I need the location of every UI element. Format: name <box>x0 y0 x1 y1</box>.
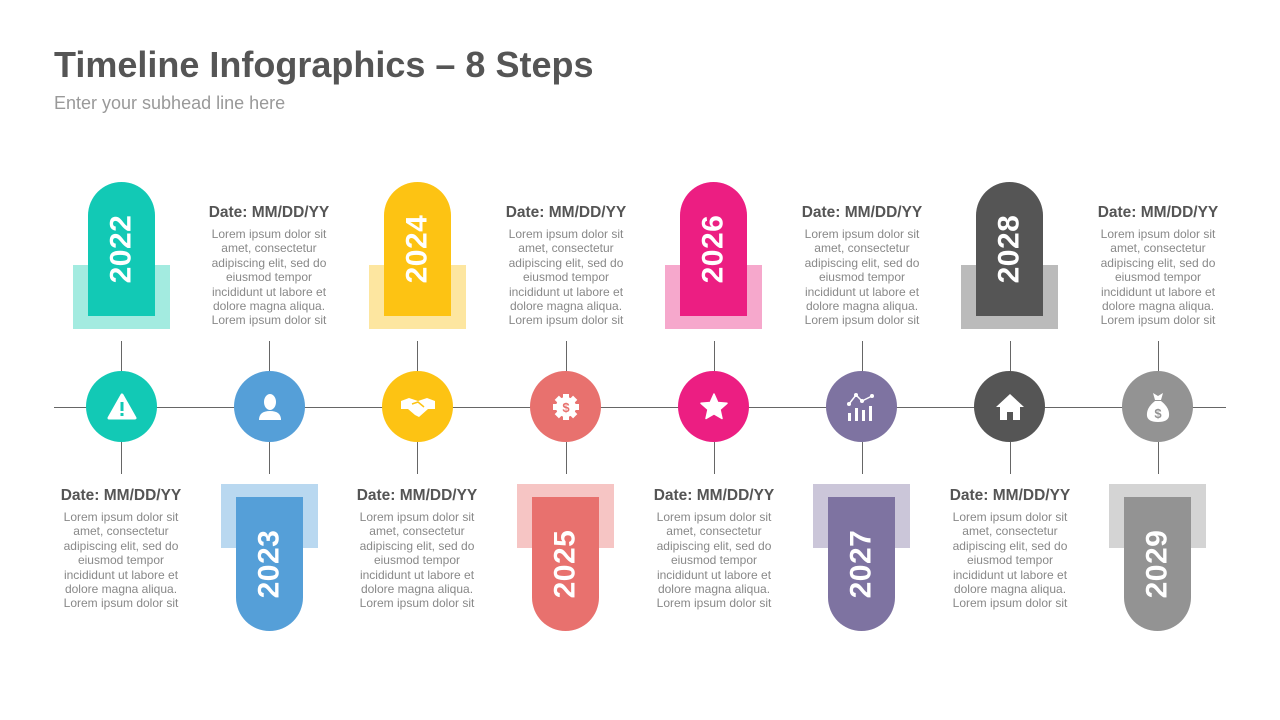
text: 2028 <box>950 487 1070 610</box>
text: 2023: eiusmod tempor <box>226 270 312 284</box>
step 2025 tab <box>517 484 614 631</box>
text: 2024: amet, consectetur <box>369 524 465 538</box>
text: 2023: dolore magna aliqua. <box>213 299 325 313</box>
text: 2029 <box>1098 204 1218 327</box>
step 2024 tab: 2024 <box>400 215 434 283</box>
step 2026 tab <box>665 182 762 329</box>
icon: gear dollar <box>530 371 601 442</box>
text: 2027: incididunt ut labore et <box>805 285 919 299</box>
text: 2029: Lorem ipsum dolor sit <box>1101 313 1215 327</box>
text: 2028: amet, consectetur <box>962 524 1058 538</box>
text: 2023: incididunt ut labore et <box>212 285 326 299</box>
text: 2025: Lorem ipsum dolor sit <box>509 313 623 327</box>
text: 2026 <box>654 487 774 610</box>
step 2028 tab <box>961 182 1058 329</box>
timeline axis <box>54 407 1226 408</box>
icon: handshake <box>382 371 453 442</box>
text: 2027: Lorem ipsum dolor sit <box>805 313 919 327</box>
text: 2027: Lorem ipsum dolor sit <box>805 227 919 241</box>
text: 2024: Lorem ipsum dolor sit <box>360 596 474 610</box>
text: 2023: amet, consectetur <box>221 241 317 255</box>
text: 2022: dolore magna aliqua. <box>65 582 177 596</box>
text: 2029: Date: MM/DD/YY <box>1098 204 1218 221</box>
text: 2024: Date: MM/DD/YY <box>357 487 477 504</box>
text: 2025: Date: MM/DD/YY <box>506 204 626 221</box>
subtitle: Enter your subhead line here <box>54 93 285 113</box>
text: 2025: amet, consectetur <box>518 241 614 255</box>
text: 2027: dolore magna aliqua. <box>806 299 918 313</box>
text: 2028: dolore magna aliqua. <box>954 582 1066 596</box>
icon: money bag: $ <box>1154 406 1162 420</box>
text: 2026: eiusmod tempor <box>671 553 757 567</box>
text: 2026: dolore magna aliqua. <box>658 582 770 596</box>
icon: money bag <box>1122 371 1193 442</box>
text: 2027: eiusmod tempor <box>819 270 905 284</box>
text: 2026: Lorem ipsum dolor sit <box>657 510 771 524</box>
icon: gear dollar: $ <box>562 400 570 414</box>
step 2023 tab <box>221 484 318 631</box>
icon: house <box>974 371 1045 442</box>
text: 2022: adipiscing elit, sed do <box>64 539 178 553</box>
text: 2029: dolore magna aliqua. <box>1102 299 1214 313</box>
text: 2029: Lorem ipsum dolor sit <box>1101 227 1215 241</box>
text: 2024: adipiscing elit, sed do <box>360 539 474 553</box>
icon: chart <box>826 371 897 442</box>
text: 2027: amet, consectetur <box>814 241 910 255</box>
text: 2027: adipiscing elit, sed do <box>805 256 919 270</box>
icon: warning <box>86 371 157 442</box>
text: 2026: Lorem ipsum dolor sit <box>657 596 771 610</box>
step 2027 tab <box>813 484 910 631</box>
step 2026 tab: 2026 <box>696 215 730 283</box>
text: 2027: Date: MM/DD/YY <box>802 204 922 221</box>
text: 2022: Lorem ipsum dolor sit <box>64 596 178 610</box>
text: 2029: eiusmod tempor <box>1115 270 1201 284</box>
text: 2029: adipiscing elit, sed do <box>1101 256 1215 270</box>
step 2023 tab: 2023 <box>252 530 286 598</box>
text: 2028: eiusmod tempor <box>967 553 1053 567</box>
text: 2022: eiusmod tempor <box>78 553 164 567</box>
text: 2025 <box>506 204 626 327</box>
step 2028 tab: 2028 <box>992 215 1026 283</box>
text: 2026: incididunt ut labore et <box>657 568 771 582</box>
text: 2025: adipiscing elit, sed do <box>509 256 623 270</box>
text: 2026: Date: MM/DD/YY <box>654 487 774 504</box>
text: 2028: Lorem ipsum dolor sit <box>953 510 1067 524</box>
step 2029 tab <box>1109 484 1206 631</box>
text: 2022: Lorem ipsum dolor sit <box>64 510 178 524</box>
text: 2029: amet, consectetur <box>1110 241 1206 255</box>
text: 2022: amet, consectetur <box>73 524 169 538</box>
step 2027 tab: 2027 <box>844 530 878 598</box>
text: 2025: Lorem ipsum dolor sit <box>509 227 623 241</box>
text: 2028: incididunt ut labore et <box>953 568 1067 582</box>
text: 2029: incididunt ut labore et <box>1101 285 1215 299</box>
text: 2025: eiusmod tempor <box>523 270 609 284</box>
text: 2023: Lorem ipsum dolor sit <box>212 313 326 327</box>
text: 2023: Lorem ipsum dolor sit <box>212 227 326 241</box>
text: 2026: adipiscing elit, sed do <box>657 539 771 553</box>
text: 2024: Lorem ipsum dolor sit <box>360 510 474 524</box>
text: 2028: adipiscing elit, sed do <box>953 539 1067 553</box>
text: 2024: incididunt ut labore et <box>360 568 474 582</box>
step 2024 tab <box>369 182 466 329</box>
text: 2023: adipiscing elit, sed do <box>212 256 326 270</box>
text: 2022 <box>61 487 181 610</box>
text: 2027 <box>802 204 922 327</box>
text: 2028: Lorem ipsum dolor sit <box>953 596 1067 610</box>
text: 2023: Date: MM/DD/YY <box>209 204 329 221</box>
text: 2023 <box>209 204 329 327</box>
title: Timeline Infographics – 8 Steps <box>54 44 594 85</box>
step 2022 tab: 2022 <box>104 215 138 283</box>
step 2022 tab <box>73 182 170 329</box>
text: 2024 <box>357 487 477 610</box>
text: 2024: dolore magna aliqua. <box>361 582 473 596</box>
step 2025 tab: 2025 <box>548 530 582 598</box>
text: 2024: eiusmod tempor <box>374 553 460 567</box>
text: 2025: dolore magna aliqua. <box>510 299 622 313</box>
text: 2025: incididunt ut labore et <box>509 285 623 299</box>
text: 2026: amet, consectetur <box>666 524 762 538</box>
icon: star <box>678 371 749 442</box>
icon: user <box>234 371 305 442</box>
text: 2022: Date: MM/DD/YY <box>61 487 181 504</box>
text: 2028: Date: MM/DD/YY <box>950 487 1070 504</box>
step 2029 tab: 2029 <box>1140 530 1174 598</box>
text: 2022: incididunt ut labore et <box>64 568 178 582</box>
